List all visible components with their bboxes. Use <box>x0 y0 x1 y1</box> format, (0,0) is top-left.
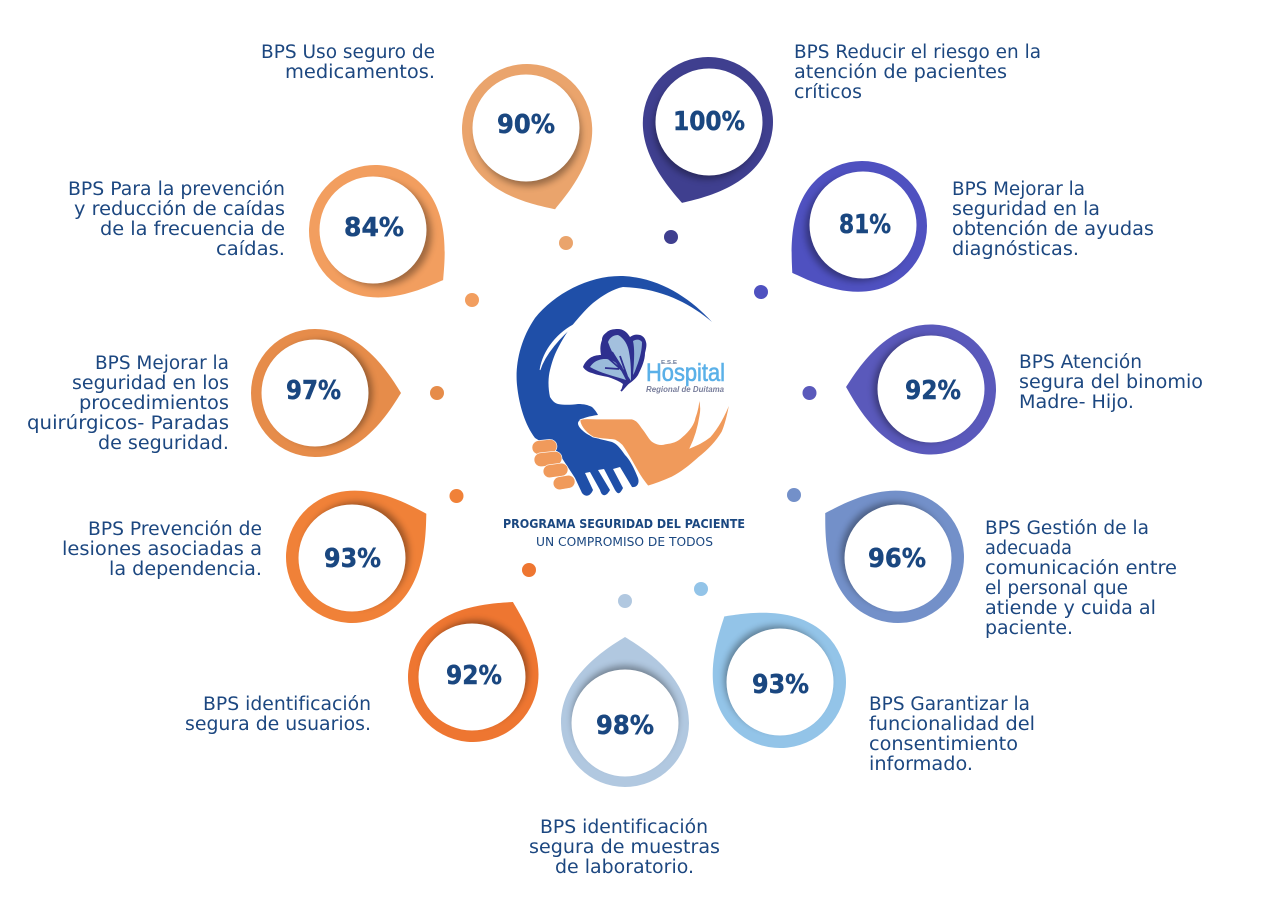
text: Hospital: Hospital <box>646 359 725 387</box>
text: gestión de la comunicación: atiende y cuida al <box>985 598 1156 619</box>
pin: 93% consentimiento informado: 93% <box>752 670 809 700</box>
pin: 93% lesiones por dependencia: 93% <box>324 544 381 574</box>
text: ayudas diagnósticas: obtención de ayudas <box>952 219 1154 240</box>
text: ayudas diagnósticas: seguridad en la <box>952 199 1100 220</box>
text: gestión de la comunicación: paciente. <box>985 618 1073 639</box>
pin: 84% prevención de caídas: 84% <box>344 213 404 243</box>
text: prevención de caídas: de la frecuencia de <box>100 219 285 240</box>
text: procedimientos quirúrgicos: seguridad en los <box>72 373 229 394</box>
pin: 96% comunicación <box>791 457 989 648</box>
pin: 98% muestras de laboratorio <box>561 637 689 787</box>
text: binomio madre-hijo: BPS Atención <box>1019 352 1142 373</box>
pin: 98% muestras de laboratorio: 98% <box>596 711 654 741</box>
text: prevención de caídas: y reducción de caídas <box>74 199 285 220</box>
pin: 92% identificación de usuarios: 92% <box>446 661 502 691</box>
text: procedimientos quirúrgicos: BPS Mejorar la <box>95 353 229 374</box>
pin: 97% procedimientos quirúrgicos: 97% <box>286 376 341 406</box>
pin: 92% binomio madre-hijo <box>844 322 998 456</box>
text: gestión de la comunicación: adecuada <box>985 538 1072 559</box>
text: procedimientos quirúrgicos <box>27 353 229 454</box>
text: lesiones por dependencia <box>62 519 262 580</box>
text: pacientes críticos <box>794 42 1041 103</box>
text: identificación de usuarios <box>185 694 371 735</box>
text: gestión de la comunicación <box>985 518 1177 639</box>
pin: 84% prevención de caídas <box>283 139 482 334</box>
text: gestión de la comunicación: comunicación entre <box>985 558 1177 579</box>
text: muestras de laboratorio: segura de muestras <box>529 837 720 858</box>
text: uso seguro de medicamentos: BPS Uso seguro de <box>261 42 435 63</box>
icon: butterfly <box>583 329 646 391</box>
icon: blue crescent and hand <box>517 276 712 496</box>
text: gestión de la comunicación: BPS Gestión de la <box>985 518 1149 539</box>
pin: 90% medicamentos: 90% <box>497 110 555 140</box>
text: uso seguro de medicamentos <box>261 42 435 83</box>
text: consentimiento informado: BPS Garantizar la <box>869 694 1030 715</box>
text: lesiones por dependencia: BPS Prevención de <box>88 519 262 540</box>
logo: hospital hands emblem <box>517 276 730 496</box>
pin: 92% identificación de usuarios <box>385 571 570 765</box>
text: consentimiento informado <box>869 694 1035 775</box>
pin: 81% ayudas diagnósticas <box>756 136 952 327</box>
pin: 92% binomio madre-hijo: 92% <box>905 376 961 406</box>
text: procedimientos quirúrgicos: quirúrgicos- Paradas <box>27 413 229 434</box>
text: pacientes críticos: atención de pacientes <box>794 62 1007 83</box>
text: pacientes críticos: BPS Reducir el riesgo en la <box>794 42 1041 63</box>
pin: 90% medicamentos <box>444 46 616 231</box>
text: ayudas diagnósticas: diagnósticas. <box>952 239 1079 260</box>
text: procedimientos quirúrgicos: procedimientos <box>79 393 229 414</box>
text: muestras de laboratorio: de laboratorio. <box>555 857 694 878</box>
text: gestión de la comunicación: el personal que <box>985 578 1128 599</box>
text: procedimientos quirúrgicos: de seguridad. <box>98 433 229 454</box>
text: lesiones por dependencia: la dependencia. <box>109 559 262 580</box>
text: consentimiento informado: consentimiento <box>869 734 1018 755</box>
text: identificación de usuarios: BPS identificación <box>203 694 371 715</box>
text: binomio madre-hijo: segura del binomio <box>1019 372 1203 393</box>
pin: 100% pacientes críticos: 100% <box>673 107 745 137</box>
text: binomio madre-hijo: Madre- Hijo. <box>1019 392 1134 413</box>
subheading: un compromiso de todos: UN COMPROMISO DE TODOS <box>536 534 713 549</box>
pin: 96% comunicación: 96% <box>868 544 926 574</box>
pin: 93% lesiones por dependencia <box>262 457 460 647</box>
icon: orange fingers <box>531 439 576 491</box>
pin: 81% ayudas diagnósticas: 81% <box>839 210 891 240</box>
text: ayudas diagnósticas: BPS Mejorar la <box>952 179 1085 200</box>
text: E.S.E: E.S.E <box>661 360 677 366</box>
text: Regional de Duitama: Regional de Duitama <box>646 385 725 394</box>
text: binomio madre-hijo <box>1019 352 1203 413</box>
pin: 97% procedimientos quirúrgicos <box>251 329 401 457</box>
text: prevención de caídas: BPS Para la prevención <box>68 179 285 200</box>
text: lesiones por dependencia: lesiones asociadas a <box>62 539 262 560</box>
pin: 100% pacientes críticos <box>620 40 790 223</box>
text: ayudas diagnósticas <box>952 179 1154 260</box>
text: consentimiento informado: funcionalidad del <box>869 714 1035 735</box>
text: uso seguro de medicamentos: medicamentos. <box>285 62 435 83</box>
text: muestras de laboratorio <box>529 817 720 878</box>
text: prevención de caídas <box>68 179 285 260</box>
text: prevención de caídas: caídas. <box>216 239 285 260</box>
text: identificación de usuarios: segura de usuarios. <box>185 714 371 735</box>
pin: 93% consentimiento informado <box>674 574 873 775</box>
icon: orange hand <box>580 398 730 486</box>
text: pacientes críticos: críticos <box>794 82 862 103</box>
connector dots <box>430 230 816 608</box>
heading: programa seguridad del paciente: PROGRAMA SEGURIDAD DEL PACIENTE <box>503 516 745 531</box>
text: consentimiento informado: informado. <box>869 754 973 775</box>
text: muestras de laboratorio: BPS identificación <box>540 817 708 838</box>
